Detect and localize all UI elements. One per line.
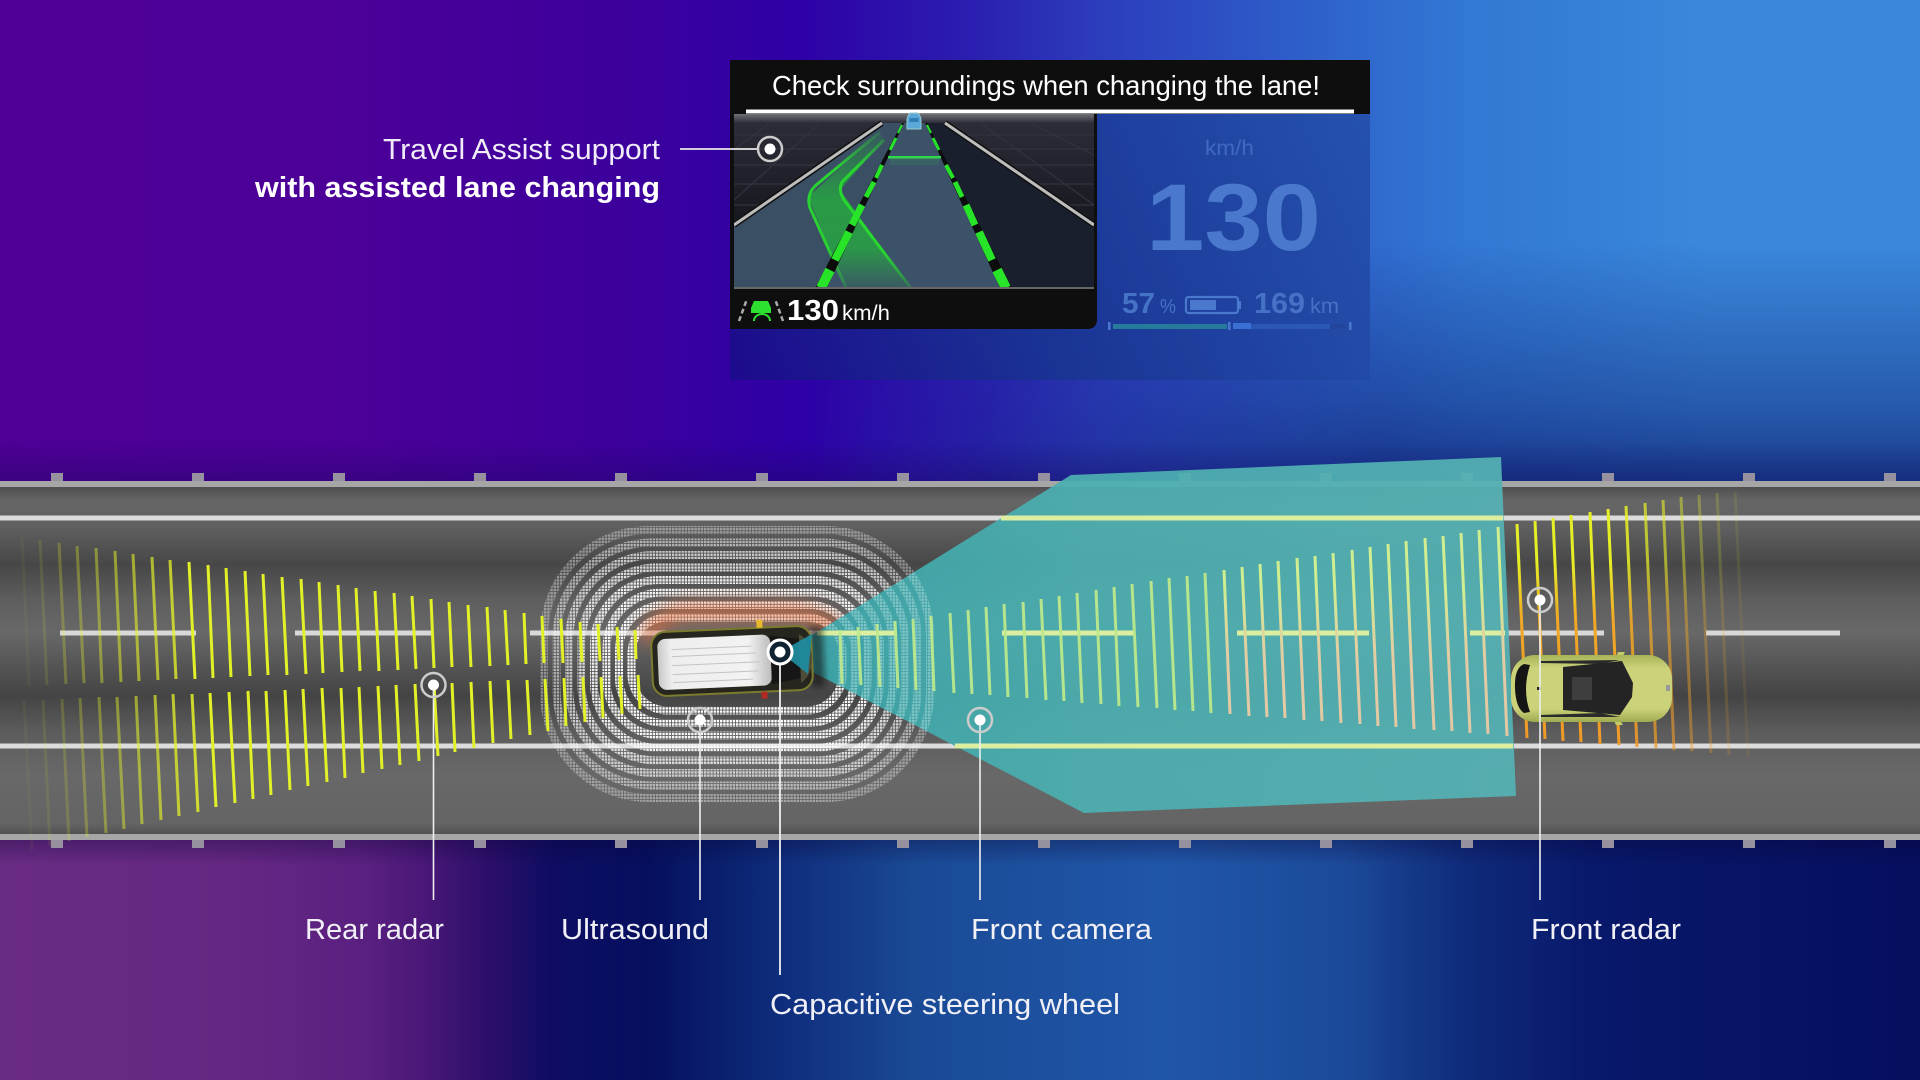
right cluster readouts: km [1310, 295, 1339, 318]
rear radar beam lower [24, 675, 640, 850]
background: upper gradient [0, 0, 1920, 490]
sensor callout: ultrasound [561, 708, 712, 946]
speed unit: km/h [1205, 137, 1254, 160]
beam inside camera field, near [840, 573, 1211, 713]
icon: lead vehicle [907, 113, 921, 129]
right cluster readouts: % [1160, 296, 1176, 318]
status bar [730, 287, 1097, 329]
rear radar beam upper [22, 537, 636, 686]
icon: assist status [739, 299, 783, 321]
guard rail posts [57, 473, 1890, 848]
panel backing [730, 60, 1370, 380]
header bar with warning text [730, 60, 1370, 114]
sensor callout: front radar: Front radar [1531, 914, 1681, 946]
right cluster readouts [1108, 137, 1352, 330]
lane markings through camera field [817, 518, 1513, 746]
battery percent: 57 [1122, 288, 1155, 320]
green car [1511, 652, 1672, 725]
range: 169 [1254, 288, 1305, 320]
nav view [734, 113, 1094, 288]
background: upper right shading [928, 270, 1920, 481]
speed unit: km/h [842, 302, 890, 325]
callout: Travel Assist support: with assisted lane changing [254, 172, 660, 204]
sensor callout: rear radar [305, 673, 446, 946]
header bar with warning text: Check surroundings when changing the lane! [772, 70, 1320, 101]
big speed: 130 [1146, 165, 1321, 271]
sensor callout: capacitive steering wheel [768, 640, 1120, 1021]
ultrasound waves seen through camera field [826, 572, 934, 732]
camera cone on ego car [780, 634, 812, 674]
icon: battery [1186, 297, 1241, 313]
lane edges [0, 516, 1920, 520]
sensor callout: front radar [1528, 588, 1681, 946]
range bar [1108, 322, 1352, 330]
road [0, 473, 1920, 848]
ultrasound field [544, 530, 930, 798]
beam beyond camera field [1517, 509, 1619, 745]
sensor callout: capacitive steering wheel: Capacitive steering wheel [770, 989, 1120, 1021]
front radar beam [840, 492, 1748, 757]
sensor callout: front camera [968, 708, 1153, 946]
callout: Travel Assist support: Travel Assist support [383, 134, 660, 166]
sensor callout: front camera: Front camera [971, 914, 1153, 946]
background: lower gradient [0, 830, 1920, 1080]
sensor callout: ultrasound: Ultrasound [561, 914, 709, 946]
beam inside camera field, far [1224, 527, 1507, 736]
panel: instrument display [730, 60, 1370, 380]
lane dashes [60, 630, 1840, 636]
current speed: 130 [787, 295, 839, 327]
guard rails [0, 481, 1920, 487]
callout: Travel Assist support [254, 134, 782, 204]
front camera field of view [812, 457, 1516, 813]
orange proximity glow [648, 612, 836, 642]
sensor callout: rear radar: Rear radar [305, 914, 444, 946]
screen frame [730, 113, 1097, 288]
ego car [650, 617, 826, 703]
